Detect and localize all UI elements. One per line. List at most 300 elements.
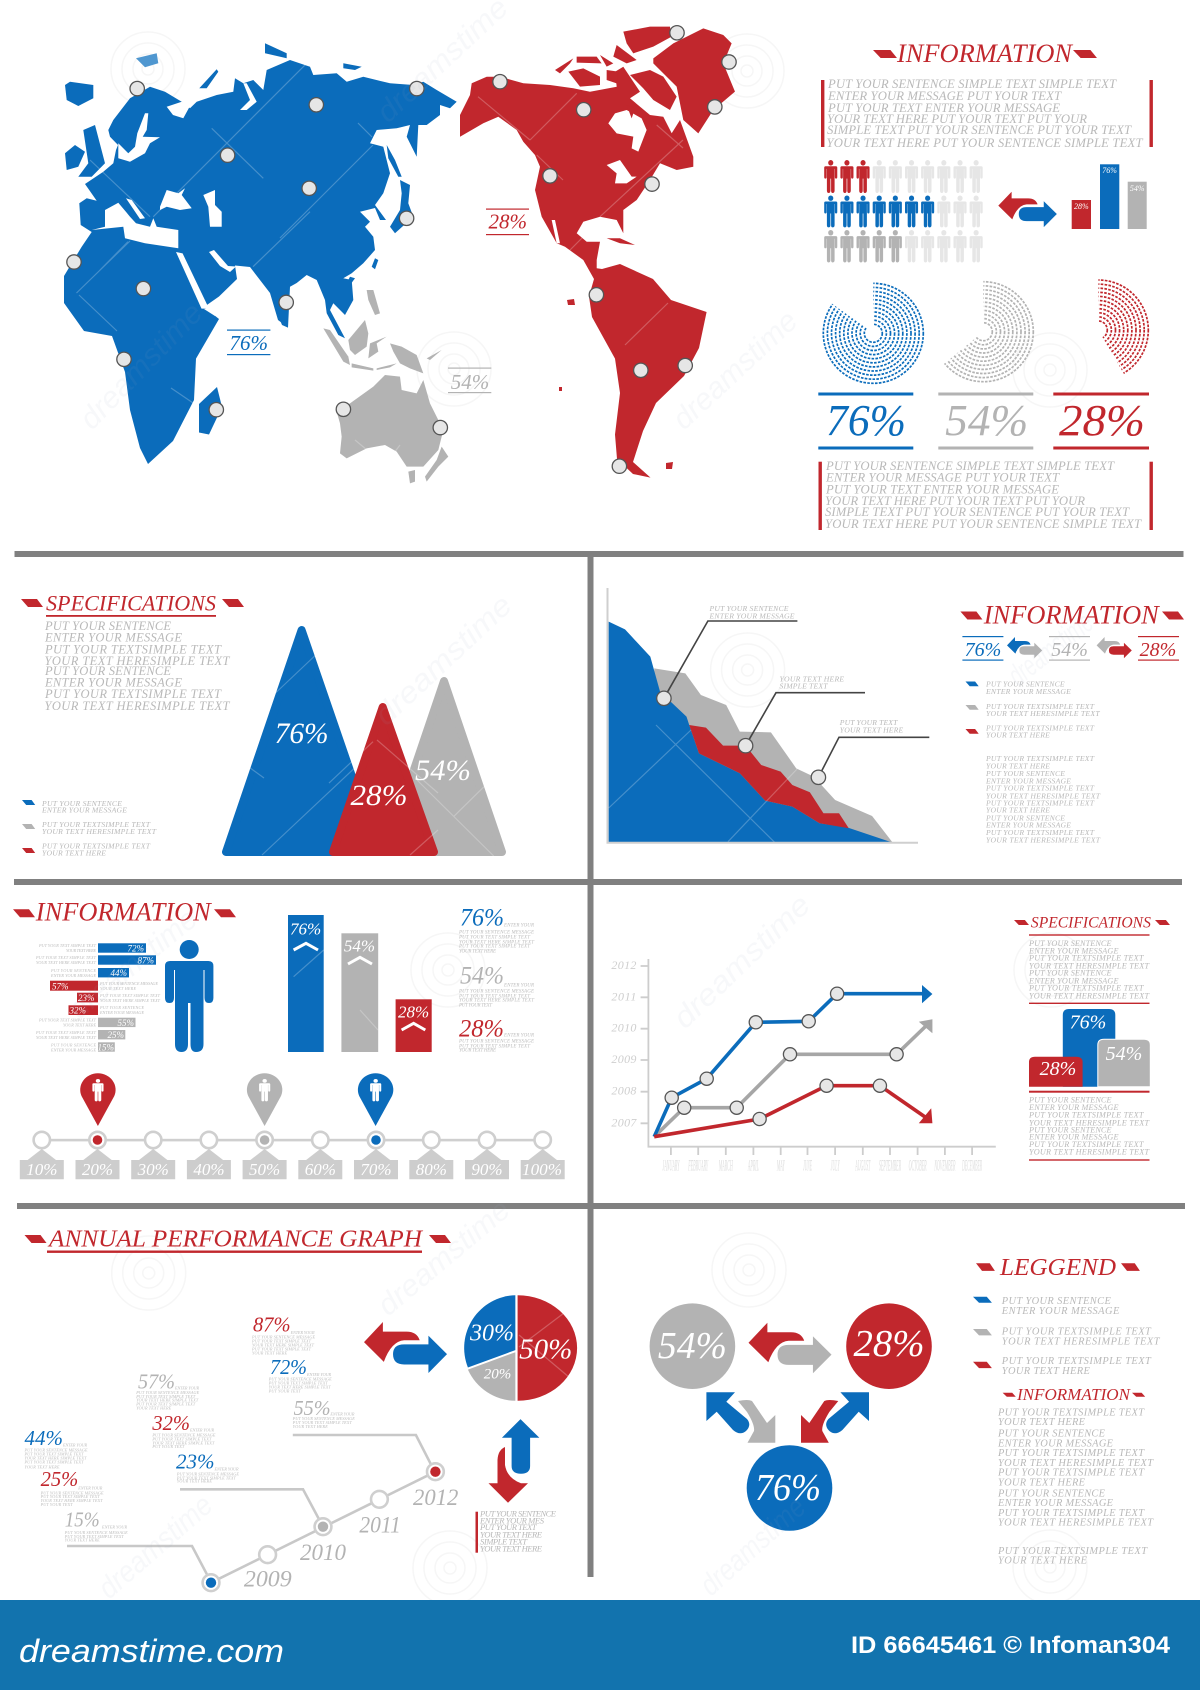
triangle chart: 54%: [415, 754, 471, 787]
comparison row: [962, 636, 1179, 661]
text: dreamstime: [370, 0, 515, 129]
line chart: [611, 958, 996, 1175]
x axis labels: MAY: [776, 1158, 785, 1175]
map region: Oceania: [323, 290, 448, 483]
text block: upper: YOUR TEXT HERESIMPLE TEXT: [1029, 991, 1150, 1000]
legend: YOUR TEXT HERE: [42, 849, 106, 858]
stat: 44%: PUT YOUR TEXT SIMPLE TEXT: [24, 1452, 84, 1457]
stat: 44%: PUT YOUR SENTENCE MESSAGE: [24, 1448, 88, 1453]
y axis labels: 2008: [611, 1084, 636, 1098]
stat: 87%: [251, 1313, 315, 1355]
stat: 25%: ENTER YOUR: [77, 1485, 103, 1490]
stat: 28%: PUT YOUR TEXT SIMPLE TEXT: [458, 1044, 531, 1049]
stat: 25%: 25%: [41, 1467, 78, 1491]
icon: blue map pin: [358, 1073, 393, 1126]
yearly timeline: 2011: [359, 1513, 401, 1538]
stat: 76%: 76%: [460, 905, 504, 932]
stat: 32%: 32%: [151, 1411, 190, 1435]
icon: person: [165, 940, 213, 1052]
yearly timeline: 2012: [413, 1485, 458, 1510]
stat: 55%: ENTER YOUR: [329, 1412, 355, 1416]
pie chart: 50%: [519, 1333, 572, 1365]
stat: 72%: PUT YOUR TEXT SIMPLE TEXT: [268, 1381, 328, 1386]
mini bar chart: [1072, 164, 1147, 229]
tall bar chart: 76%: [290, 919, 321, 938]
text block: SIMPLE TEXT: [480, 1536, 528, 1546]
pie chart: [464, 1295, 577, 1401]
text block: PUT YOUR TEXTSIMPLE TEXT: [997, 1468, 1145, 1479]
x axis labels: APRIL: [748, 1158, 759, 1175]
stat: 15%: PUT YOUR TEXT SIMPLE TEXT: [64, 1534, 124, 1539]
stat: 87%: ENTER YOUR: [290, 1330, 315, 1335]
horizontal bars: 23%: [78, 993, 94, 1003]
stat: 87%: PUT YOUR TEXT SIMPLE TEXT: [251, 1346, 312, 1351]
stat: 57%: [135, 1369, 200, 1410]
tall bar chart: [288, 915, 432, 1052]
mini bar chart: 28%: [1074, 202, 1089, 211]
stacked bars: 28%: [1040, 1058, 1076, 1080]
horizontal bars: PUT YOUR TEXT SIMPLE TEXT: [38, 943, 97, 948]
text block: PUT YOUR TEXTSIMPLE TEXT: [985, 799, 1095, 808]
horizontal bars: YOUR TEXT HERE: [100, 986, 136, 991]
horizontal bars: 57%: [52, 982, 68, 992]
stat: 76%: PUT YOUR TEXT SIMPLE TEXT: [458, 935, 531, 940]
horizontal bars: YOUR TEXT HERE SIMPLE TEXT: [36, 1035, 97, 1040]
text block: PUT YOUR SENTENCE: [44, 664, 171, 678]
stat: 25%: PUT YOUR SENTENCE MESSAGE: [40, 1490, 104, 1495]
text block: upper: PUT YOUR SENTENCE: [1028, 969, 1112, 978]
icon: left exchange arrows: [706, 1392, 775, 1443]
stat: 32%: YOUR TEXT HERE SIMPLE TEXT: [152, 1441, 215, 1446]
panel: annual performance graph: [24, 1227, 577, 1592]
text block: PUT YOUR TEXTSIMPLE TEXT: [997, 1546, 1148, 1557]
text block: lower: YOUR TEXT HERESIMPLE TEXT: [1029, 1118, 1150, 1127]
horizontal bars: 44%: [110, 968, 127, 978]
panel: top right information: [818, 39, 1153, 531]
legend: ENTER YOUR MESSAGE: [985, 687, 1071, 696]
text block: YOUR TEXT HERE: [998, 1555, 1088, 1566]
text block: lower: ENTER YOUR MESSAGE: [1028, 1133, 1118, 1142]
stat: 72%: [268, 1355, 332, 1394]
text block: PUT YOUR SENTENCE: [997, 1488, 1106, 1499]
stat: 76%: [458, 905, 535, 954]
stat: 23%: [176, 1449, 239, 1484]
text block: upper: [821, 77, 1153, 150]
y axis labels: 2007: [611, 1115, 637, 1129]
panel: line chart and specifications: DECEMBER: [962, 1158, 982, 1175]
callout 2: YOUR TEXT HERE: [780, 674, 844, 683]
stacked bars: 54%: [1106, 1043, 1142, 1065]
text block: upper: ENTER YOUR MESSAGE: [1028, 946, 1118, 955]
tall bar chart: 54%: [344, 937, 375, 956]
text block: lower: PUT YOUR TEXTSIMPLE TEXT: [1028, 1140, 1145, 1149]
horizontal bars: ENTER YOUR MESSAGE: [99, 1010, 144, 1015]
text block: ENTER YOUR MESSAGE: [985, 821, 1071, 830]
stat: 28%: PUT YOUR SENTENCE MESSAGE: [458, 1039, 534, 1044]
text block: [476, 1509, 557, 1554]
legend: [966, 680, 1100, 739]
text block: YOUR TEXT HERESIMPLE TEXT: [44, 654, 231, 668]
map region: Americas: [460, 27, 735, 478]
legend: PUT YOUR SENTENCE: [985, 680, 1065, 689]
text block: YOUR TEXT HERESIMPLE TEXT: [44, 699, 231, 713]
stat: 72%: 72%: [270, 1355, 307, 1379]
horizontal bars: YOUR TEXT HERE SIMPLE TEXT: [36, 960, 97, 965]
text block: lower: ENTER YOUR MESSAGE PUT YOUR TEXT: [825, 471, 1060, 485]
stat: 87%: PUT YOUR SENTENCE MESSAGE: [251, 1334, 315, 1339]
x axis labels: [662, 1158, 982, 1175]
circle: 28%: 28%: [854, 1323, 924, 1365]
horizontal bars: PUT YOUR TEXT SIMPLE TEXT: [35, 955, 97, 960]
text block: YOUR TEXT HERESIMPLE TEXT: [986, 835, 1101, 844]
stat: 32%: PUT YOUR TEXT: [151, 1444, 185, 1449]
stat: 76%: YOUR TEXT HERE: [459, 949, 496, 954]
stat: 28%: [458, 1016, 534, 1054]
mini bar chart: 54%: [1130, 184, 1145, 193]
text block: YOUR TEXT HERESIMPLE TEXT: [998, 1458, 1154, 1469]
stat: 23%: 23%: [176, 1449, 214, 1473]
stat: 87%: PUT YOUR TEXT SIMPLE TEXT: [251, 1338, 312, 1343]
text block: PUT YOUR TEXTSIMPLE TEXT: [985, 784, 1095, 793]
heading: legend: LEGGEND: [999, 1255, 1116, 1281]
footer bar: [0, 1600, 1200, 1690]
horizontal bars: ENTER YOUR MESSAGE: [50, 1048, 96, 1052]
text block: YOUR TEXT HERESIMPLE TEXT: [986, 791, 1101, 800]
legend: ENTER YOUR MESSAGE: [41, 806, 127, 815]
mini bar chart: 76%: [1102, 166, 1117, 175]
callout 2: SIMPLE TEXT: [780, 681, 828, 690]
text block: YOUR TEXT HERE: [986, 761, 1050, 770]
text block: lower: PUT YOUR SENTENCE SIMPLE TEXT SIMPLE TEXT: [825, 459, 1115, 473]
x axis labels: OCTOBER: [909, 1158, 927, 1175]
stat: 32%: PUT YOUR TEXT SIMPLE TEXT: [151, 1437, 212, 1442]
percentage timeline: 80%: [416, 1160, 447, 1179]
horizontal bars: 87%: [138, 956, 154, 966]
text block: lower: YOUR TEXT HERE PUT YOUR SENTENCE SIMPLE TEXT: [825, 517, 1142, 531]
stat: 25%: YOUR TEXT HERE SIMPLE TEXT: [41, 1498, 103, 1503]
circle: 76%: [747, 1445, 832, 1531]
radial chart: 76%: [823, 283, 923, 383]
stat: 54%: [458, 962, 535, 1009]
panel: information with bars and timeline: [13, 898, 565, 1179]
legend: YOUR TEXT HERE: [986, 730, 1050, 739]
pie chart: 20%: [484, 1366, 511, 1382]
stat: 15%: PUT YOUR SENTENCE MESSAGE: [64, 1530, 128, 1535]
stat: 76%: ENTER YOUR: [503, 924, 534, 929]
text block: lower: [818, 459, 1153, 531]
heading: information: INFORMATION: [983, 600, 1160, 629]
text block: lower: PUT YOUR TEXT ENTER YOUR MESSAGE: [825, 482, 1059, 496]
legend: [22, 799, 157, 858]
series: gray: [654, 1019, 932, 1137]
text: dreamstime: [371, 1193, 517, 1322]
text: dreamstime: [694, 1491, 812, 1602]
horizontal bars: 55%: [118, 1018, 134, 1028]
text block: ENTER YOUR MESSAGE: [985, 776, 1071, 785]
text block: YOUR TEXT HERE: [998, 1417, 1086, 1428]
stat: 55%: YOUR TEXT HERE: [293, 1424, 328, 1429]
callout 3: PUT YOUR TEXT: [839, 718, 898, 727]
horizontal bars: PUT YOUR SENTENCE: [50, 1042, 96, 1048]
text block: upper: YOUR TEXT HERESIMPLE TEXT: [1029, 962, 1150, 971]
text block: PUT YOUR TEXTSIMPLE TEXT: [997, 1407, 1145, 1418]
x axis labels: JANUARY: [662, 1158, 680, 1175]
callout 1: PUT YOUR SENTENCE: [708, 604, 789, 613]
map label: 76%: 76%: [229, 331, 268, 355]
stat: 28%: 28%: [1059, 396, 1145, 445]
yearly timeline: 2010: [300, 1540, 346, 1565]
text block: upper: PUT YOUR SENTENCE SIMPLE TEXT SIMPLE TEXT: [827, 77, 1117, 91]
text block: PUT YOUR TEXTSIMPLE TEXT: [44, 642, 222, 656]
stat: 28%: YOUR TEXT HERE: [459, 1049, 496, 1054]
text: dreamstime: [92, 1489, 219, 1605]
text block: upper: ENTER YOUR MESSAGE: [1028, 976, 1118, 985]
stat: 76%: PUT YOUR TEXT SIMPLE TEXT: [458, 945, 531, 950]
circle: 54%: 54%: [658, 1325, 727, 1367]
horizontal bars: YOUR TEXT HERE: [63, 1022, 96, 1028]
series: blue: [654, 985, 932, 1137]
stat: 54%: PUT YOUR TEXT: [458, 1004, 493, 1009]
yearly timeline: [67, 1435, 458, 1592]
stat: 72%: YOUR TEXT HERE SIMPLE TEXT: [269, 1385, 331, 1390]
legend: PUT YOUR TEXTSIMPLE TEXT: [41, 820, 151, 829]
x axis labels: NOVEMBER: [934, 1158, 955, 1175]
circle: 28%: [846, 1303, 932, 1389]
text block: PUT YOUR SENTENCE: [985, 814, 1065, 823]
text block: lower: YOUR TEXT HERE PUT YOUR TEXT PUT YOUR: [825, 494, 1085, 508]
pictogram: people rows: [824, 160, 983, 262]
horizontal bars: ENTER YOUR MESSAGE: [50, 973, 96, 978]
stat: 44%: YOUR TEXT HERE: [24, 1464, 60, 1469]
legend: PUT YOUR TEXTSIMPLE TEXT: [985, 723, 1095, 732]
text block: PUT YOUR SENTENCE: [997, 1429, 1106, 1440]
text block: ENTER YOUR MESSAGE: [997, 1439, 1114, 1450]
stat: 54%: PUT YOUR SENTENCE MESSAGE: [458, 989, 534, 994]
stat: 57%: PUT YOUR SENTENCE MESSAGE: [135, 1390, 200, 1395]
text block: upper: PUT YOUR TEXTSIMPLE TEXT: [1028, 984, 1145, 993]
stat: 15%: ENTER YOUR: [101, 1524, 127, 1529]
text block: PUT YOUR TEXTSIMPLE TEXT: [985, 828, 1095, 837]
x axis labels: FEBRUARY: [688, 1158, 709, 1175]
stat: 72%: ENTER YOUR: [306, 1372, 331, 1377]
text block: PUT YOUR TEXTSIMPLE TEXT: [997, 1508, 1145, 1519]
horizontal bars: 32%: [68, 1006, 86, 1016]
text block: YOUR TEXT HERE: [480, 1544, 543, 1554]
stat: 57%: YOUR TEXT HERE: [136, 1405, 172, 1410]
percentage timeline: 100%: [522, 1160, 562, 1179]
text block: PUT YOUR SENTENCE: [479, 1509, 557, 1519]
text: dreamstime: [1002, 606, 1100, 693]
text block: ENTER YOUR MESSAGE: [997, 1498, 1114, 1509]
text block: upper: PUT YOUR SENTENCE: [1028, 939, 1112, 948]
callout 1: [657, 604, 797, 706]
callout 3: [811, 718, 929, 784]
legend entries: PUT YOUR TEXTSIMPLE TEXT: [1001, 1326, 1152, 1337]
stat: 87%: YOUR TEXT HERE SIMPLE TEXT: [252, 1342, 315, 1347]
text block: upper: SIMPLE TEXT PUT YOUR SENTENCE PUT YOUR TEXT: [827, 123, 1132, 137]
pie chart: 30%: [469, 1321, 514, 1347]
yearly timeline: 2009: [244, 1567, 292, 1592]
stacked bars: 76%: [1070, 1011, 1106, 1033]
horizontal bars: PUT YOUR SENTENCE MESSAGE: [99, 981, 158, 986]
x axis labels: JULY: [831, 1158, 840, 1175]
stat: 23%: PUT YOUR TEXT SIMPLE TEXT: [176, 1475, 237, 1480]
callout 1: ENTER YOUR MESSAGE: [708, 611, 795, 620]
x axis labels: SEPTEMBER: [879, 1158, 901, 1175]
legend entries: PUT YOUR SENTENCE: [1001, 1296, 1111, 1307]
stat: 72%: PUT YOUR SENTENCE MESSAGE: [268, 1377, 332, 1382]
stat: 72%: PUT YOUR TEXT: [268, 1389, 301, 1394]
comparison row: 76%: [965, 639, 1001, 661]
text: dreamstime: [666, 304, 804, 436]
stat: 25%: [40, 1467, 104, 1507]
text block: YOUR TEXT HERESIMPLE TEXT: [998, 1518, 1154, 1529]
heading: legend: [976, 1255, 1140, 1281]
map pins: [67, 26, 736, 473]
text: dreamstime: [667, 888, 817, 1035]
horizontal bars: YOUR TEXT HERE: [66, 948, 96, 953]
text block: PUT YOUR TEXT: [479, 1522, 538, 1532]
stat: 57%: ENTER YOUR: [174, 1385, 199, 1390]
stat: 87%: 87%: [253, 1313, 290, 1337]
text block: lower: ENTER YOUR MESSAGE: [1028, 1103, 1118, 1112]
circle: 54%: [650, 1303, 735, 1389]
horizontal bars: PUT YOUR TEXT SIMPLE TEXT: [99, 993, 161, 998]
text block: lower: YOUR TEXT HERESIMPLE TEXT: [1029, 1148, 1150, 1157]
text block: YOUR TEXT HERE: [480, 1529, 543, 1539]
percentage timeline: 70%: [360, 1160, 392, 1179]
heading: specifications: SPECIFICATIONS: [1031, 915, 1151, 932]
radial chart: 54%: [933, 282, 1033, 382]
tall bar chart: 28%: [398, 1002, 429, 1021]
text block: YOUR TEXT HERE: [998, 1477, 1086, 1488]
subheading: information: INFORMATION: [1016, 1385, 1131, 1404]
percentage timeline: [20, 1132, 565, 1179]
text block: PUT YOUR SENTENCE: [44, 619, 171, 633]
icon: gray map pin: [247, 1073, 282, 1126]
circle: 76%: 76%: [755, 1467, 821, 1509]
stat: 57%: PUT YOUR TEXT SIMPLE TEXT: [135, 1401, 196, 1406]
stat: 57%: YOUR TEXT HERE SIMPLE TEXT: [136, 1397, 199, 1402]
stat: 55%: PUT YOUR SENTENCE MESSAGE: [292, 1416, 355, 1421]
text block: ENTER YOUR MESSAGE: [44, 676, 182, 690]
text block: upper: PUT YOUR TEXT ENTER YOUR MESSAGE: [827, 101, 1060, 115]
text: dreamstime: [63, 902, 204, 1025]
panel: specifications triangles: [21, 591, 502, 858]
callout 2: [738, 674, 865, 753]
panel: world map: [64, 26, 736, 483]
text block: lower: PUT YOUR TEXTSIMPLE TEXT: [1028, 1111, 1145, 1120]
triangle chart: 28%: [350, 779, 408, 812]
heading: information: INFORMATION: [35, 898, 212, 927]
text block: lower: SIMPLE TEXT PUT YOUR SENTENCE PUT YOUR TEXT: [825, 505, 1130, 519]
legend entries: ENTER YOUR MESSAGE: [1001, 1306, 1120, 1317]
heading: specifications: SPECIFICATIONS: [46, 591, 216, 616]
stat: 54%: 54%: [460, 962, 504, 989]
stat: 44%: ENTER YOUR: [62, 1443, 87, 1448]
legend entries: YOUR TEXT HERE: [1002, 1366, 1090, 1377]
legend entries: YOUR TEXT HERESIMPLE TEXT: [1002, 1336, 1161, 1347]
percentage timeline: 50%: [249, 1160, 280, 1179]
text: dreamstime: [73, 296, 210, 436]
stat: 32%: PUT YOUR SENTENCE MESSAGE: [151, 1433, 216, 1438]
icon: top exchange arrows: [748, 1323, 833, 1375]
legend: PUT YOUR TEXTSIMPLE TEXT: [985, 702, 1095, 711]
stat: 55%: PUT YOUR TEXT SIMPLE TEXT: [292, 1420, 352, 1425]
text: dreamstime: [368, 589, 519, 732]
stat: 76%: PUT YOUR SENTENCE MESSAGE: [458, 930, 534, 935]
text block: lower: [1028, 1091, 1150, 1161]
panel: circle flow and legend: [650, 1255, 1161, 1566]
stat: 76%: 76%: [826, 396, 906, 445]
legend: PUT YOUR SENTENCE: [41, 799, 122, 808]
stat: 54%: PUT YOUR TEXT SIMPLE TEXT: [458, 994, 531, 999]
stat: 23%: PUT YOUR SENTENCE MESSAGE: [176, 1471, 239, 1476]
horizontal bars: YOUR TEXT HERE SIMPLE TEXT: [100, 998, 161, 1003]
text block: lower: PUT YOUR SENTENCE: [1028, 1125, 1112, 1134]
stat: 15%: [64, 1508, 128, 1543]
percentage timeline: 30%: [137, 1160, 169, 1179]
triangle chart: 76%: [275, 717, 329, 750]
y axis labels: 2010: [611, 1021, 636, 1035]
legend entries: PUT YOUR TEXTSIMPLE TEXT: [1001, 1356, 1152, 1367]
x axis labels: AUGUST: [855, 1158, 871, 1175]
text block: upper: YOUR TEXT HERE PUT YOUR SENTENCE SIMPLE TEXT: [826, 136, 1143, 150]
stat: 57%: 57%: [138, 1369, 175, 1393]
x axis labels: MARCH: [719, 1158, 733, 1175]
stat: 32%: ENTER YOUR: [189, 1427, 214, 1432]
percentage timeline: 40%: [193, 1160, 224, 1179]
stat: 15%: YOUR TEXT HERE: [65, 1538, 100, 1543]
text block: [44, 619, 231, 713]
stat: 87%: YOUR TEXT HERE: [252, 1350, 287, 1355]
panel: line chart and specifications: [611, 915, 1170, 1175]
radial chart: 28%: [1098, 279, 1150, 374]
area chart: [608, 588, 918, 843]
icon: vertical arrows: [488, 1418, 541, 1503]
stacked bars: [1029, 1009, 1150, 1087]
y axis labels: [611, 958, 637, 1129]
stat: 25%: PUT YOUR TEXT: [40, 1502, 73, 1507]
comparison row: 54%: [1051, 639, 1088, 661]
text block: [985, 754, 1101, 844]
footer logo text: dreamstime.com: [19, 1633, 284, 1669]
text block: PUT YOUR TEXTSIMPLE TEXT: [997, 1448, 1145, 1459]
stat: 44%: PUT YOUR TEXT SIMPLE TEXT: [24, 1460, 84, 1465]
horizontal bars: PUT YOUR SENTENCE: [99, 1005, 144, 1010]
stat: 55%: 55%: [294, 1396, 331, 1420]
legend: YOUR TEXT HERESIMPLE TEXT: [986, 709, 1100, 718]
text block: upper: PUT YOUR TEXTSIMPLE TEXT: [1028, 954, 1145, 963]
text block: [997, 1407, 1154, 1566]
y axis labels: 2011: [611, 989, 636, 1003]
stat: 23%: YOUR TEXT HERE: [177, 1479, 212, 1484]
horizontal bars: PUT YOUR TEXT SIMPLE TEXT: [35, 1030, 97, 1035]
stat: 25%: PUT YOUR TEXT SIMPLE TEXT: [40, 1494, 100, 1499]
map label: 54%: 54%: [451, 370, 489, 394]
legend: YOUR TEXT HERESIMPLE TEXT: [42, 827, 157, 836]
icon: exchange arrows: [364, 1322, 448, 1375]
stat: 54%: ENTER YOUR: [503, 984, 534, 989]
horizontal bars: 25%: [108, 1030, 124, 1040]
stat: 55%: [292, 1396, 355, 1429]
stat: 54%: YOUR TEXT HERE SIMPLE TEXT: [459, 999, 535, 1004]
heading: information: INFORMATION: [896, 39, 1074, 68]
percentage timeline: 20%: [82, 1160, 113, 1179]
horizontal bars: 72%: [128, 944, 144, 954]
legend: PUT YOUR TEXTSIMPLE TEXT: [41, 842, 151, 851]
legend entries: [973, 1296, 1161, 1377]
